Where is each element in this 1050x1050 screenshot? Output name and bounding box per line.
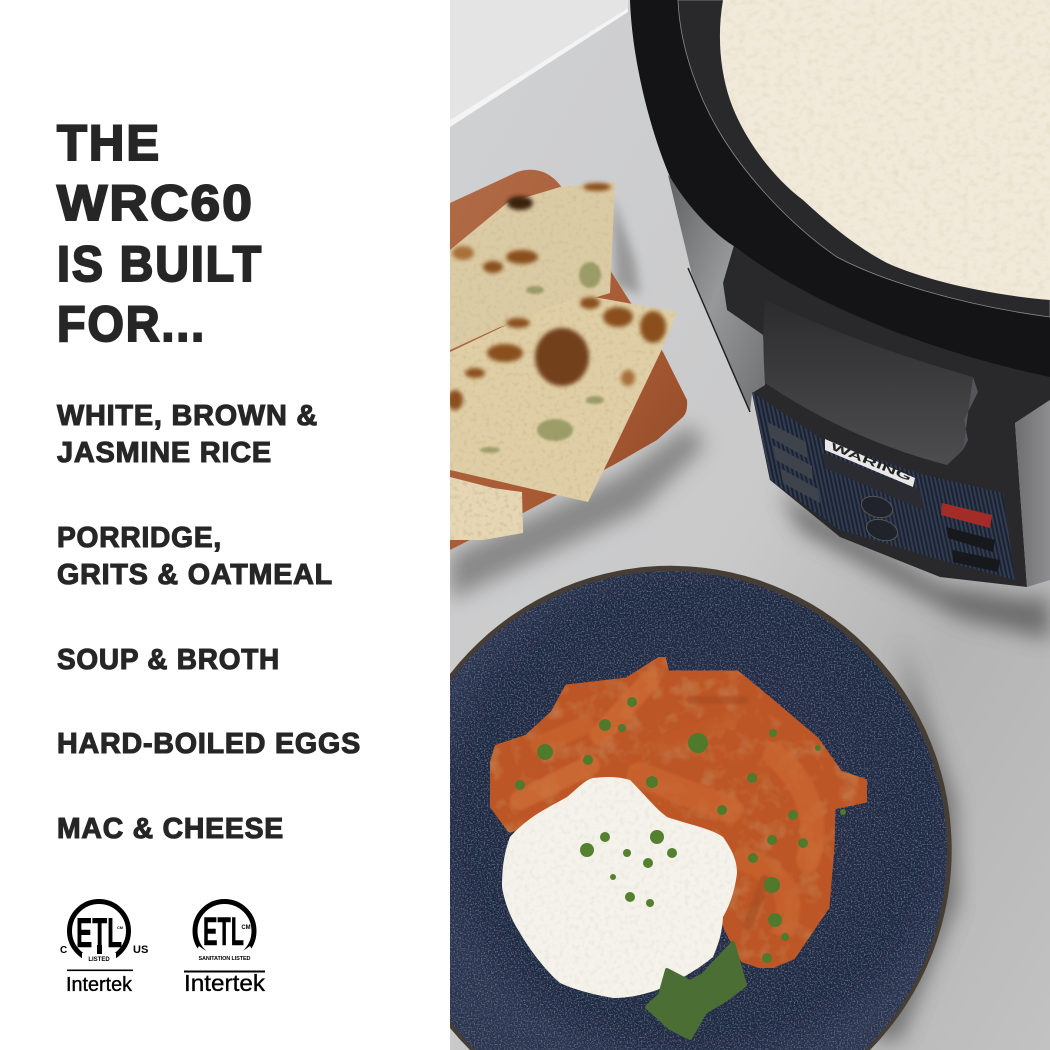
use: porridge [57, 522, 333, 591]
certification logo: ETL listed: Intertek [66, 974, 133, 996]
use: porridge: GRITS & OATMEAL [57, 559, 333, 591]
naan back [450, 182, 615, 350]
use: soup: SOUP & BROTH [57, 644, 280, 676]
certification logo: ETL listed: ETL [76, 909, 122, 956]
use: porridge: PORRIDGE, [57, 522, 222, 554]
left white panel [0, 0, 450, 1050]
use: rice [57, 400, 318, 469]
white rice mound [502, 777, 737, 998]
naan bread on wooden tray [447, 170, 687, 550]
use: rice: WHITE, BROWN & [57, 400, 318, 432]
plate rim [450, 566, 952, 1050]
certification logo: ETL sanitation: Intertek [184, 970, 266, 996]
plate shadow [870, 640, 958, 1040]
steel counter [450, 0, 1050, 1050]
plate of curry and rice [450, 566, 952, 1050]
certification logo: ETL listed: CM [117, 925, 124, 930]
cooker silver side [668, 175, 765, 412]
wooden tray [450, 170, 687, 550]
rice in cooker [720, 0, 1050, 300]
naan char spots [447, 183, 666, 410]
back counter panel [450, 0, 628, 120]
certification logo: ETL listed: LISTED [88, 957, 110, 963]
title: THE [57, 115, 161, 171]
cilantro garnish [647, 943, 745, 1038]
rice herbs [580, 830, 677, 907]
plate surface [450, 571, 947, 1050]
title: IS BUILT [57, 236, 263, 292]
certification logo: ETL sanitation: ETL [203, 910, 244, 954]
list of uses [57, 400, 361, 845]
use: rice: JASMINE RICE [57, 437, 272, 469]
brand badge [825, 439, 915, 487]
certification logo: ETL sanitation: SANITATION LISTED [198, 956, 251, 962]
certification logo: ETL listed [60, 902, 148, 996]
cooker shadow [780, 490, 1050, 640]
use: eggs: HARD-BOILED EGGS [57, 728, 361, 760]
rice cooker [630, 0, 1050, 587]
cooker body [723, 235, 1050, 587]
certification logo: ETL listed: C [60, 945, 67, 956]
title [57, 115, 263, 352]
control panel: WARING [829, 442, 913, 484]
outer black rim [630, 0, 1050, 377]
curry herbs [515, 697, 846, 963]
title: FOR... [57, 296, 206, 352]
naan herbs [480, 262, 604, 453]
use: mac and cheese: MAC & CHEESE [57, 813, 284, 845]
certification logo: ETL sanitation [184, 902, 266, 996]
latch handle [764, 300, 973, 465]
product photo [450, 0, 1050, 1050]
inner grey rim [678, 0, 1050, 317]
control panel [752, 392, 1015, 580]
certification logo: ETL listed: US [133, 944, 148, 956]
certification logo: ETL sanitation: CM [241, 925, 251, 931]
naan front [450, 295, 677, 502]
naan small piece [450, 477, 523, 540]
curry [490, 657, 867, 968]
title: WRC60 [57, 175, 254, 231]
naan tray shadow [450, 425, 705, 600]
chicken strips [520, 680, 812, 925]
cooker silver corner [1015, 400, 1050, 587]
